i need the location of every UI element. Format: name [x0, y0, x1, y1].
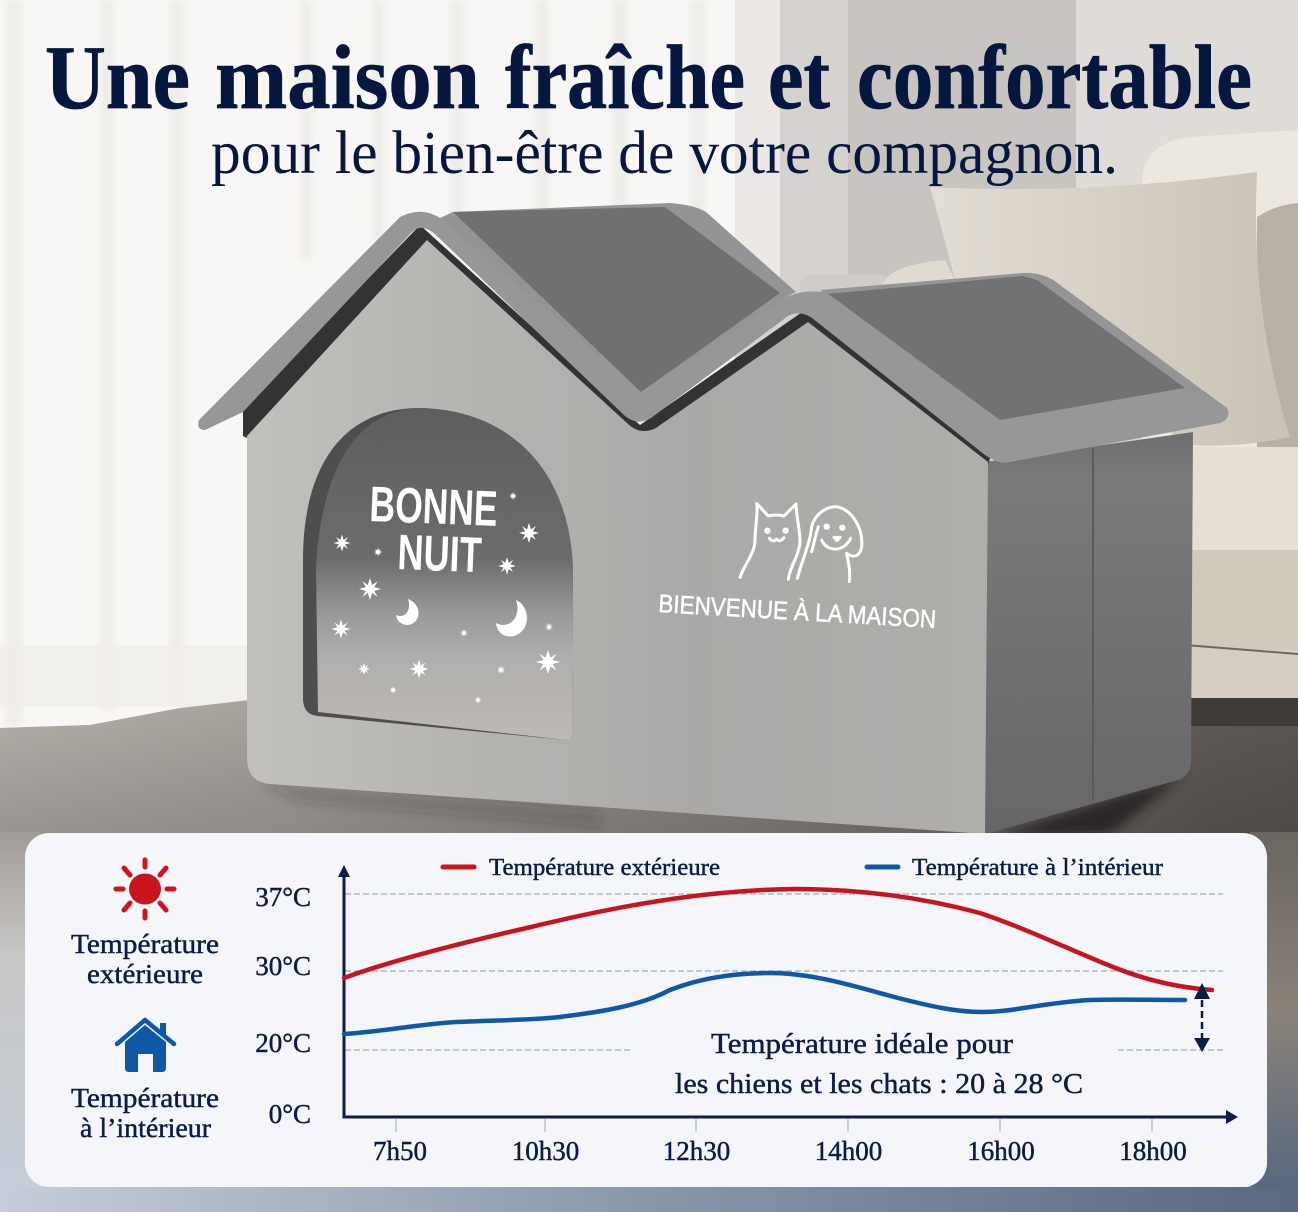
title: fraîche — [505, 27, 745, 128]
wall — [848, 0, 1298, 300]
window text — [369, 476, 499, 583]
right strip behind panel — [1250, 832, 1298, 1188]
front roof trim — [198, 212, 1228, 463]
x axis labels: 7h50 — [373, 1136, 427, 1166]
title: maison — [215, 27, 480, 128]
label: indoor temperature — [71, 1083, 219, 1143]
axes — [338, 865, 1238, 1124]
pet house — [198, 203, 1228, 834]
x axis labels: 10h30 — [512, 1136, 579, 1166]
icon: sun — [116, 860, 174, 918]
label: outdoor temperature: extérieure — [87, 959, 203, 989]
y axis labels: 20°C — [255, 1028, 311, 1058]
bottom strip — [0, 1187, 1298, 1212]
title: confortable — [857, 27, 1252, 128]
curtain — [0, 0, 848, 728]
y axis labels: 30°C — [255, 951, 311, 981]
line: indoor temperature — [344, 973, 1185, 1034]
cat — [740, 503, 800, 579]
label: outdoor temperature: Température — [71, 929, 219, 959]
icon: house — [117, 1020, 174, 1072]
house side wall — [985, 432, 1193, 834]
callout: ideal temperature — [675, 1028, 1083, 1100]
x axis labels: 16h00 — [967, 1136, 1035, 1166]
right roof surface — [820, 273, 1227, 440]
sofa — [800, 130, 1298, 726]
x axis labels: 12h30 — [663, 1136, 730, 1166]
house front wall — [247, 240, 988, 834]
title — [45, 27, 1252, 128]
x axis labels: 18h00 — [1119, 1136, 1187, 1166]
dog — [797, 507, 862, 582]
house shadow on floor — [255, 775, 1185, 838]
left strip behind panel — [0, 832, 40, 1188]
legend: indoor: Température à l’intérieur — [912, 855, 1163, 881]
panel: temperature chart — [25, 833, 1267, 1187]
label: outdoor temperature — [71, 929, 219, 989]
grid lines — [345, 894, 1223, 1132]
x axis labels: 14h00 — [815, 1136, 882, 1166]
legend: outdoor: Température extérieure — [489, 855, 720, 881]
callout: ideal temperature: Température idéale pour — [711, 1028, 1013, 1060]
line: outdoor temperature — [344, 889, 1212, 990]
x axis labels — [373, 1136, 1187, 1166]
title: et — [768, 27, 830, 128]
logo text: BIENVENUE À LA MAISON — [658, 589, 937, 634]
callout: ideal temperature: les chiens et les chats : 20 à 28 °C — [675, 1068, 1083, 1100]
dark gap under roof — [243, 225, 992, 465]
label: indoor temperature: Température — [71, 1083, 219, 1113]
window stars and moons — [332, 492, 560, 704]
y axis labels: 0°C — [269, 1099, 311, 1129]
back roof surface — [440, 203, 796, 410]
title: Une — [45, 27, 190, 128]
window — [303, 408, 573, 740]
y axis labels: 37°C — [255, 882, 311, 912]
subtitle: pour le bien-être de votre compagnon. — [211, 120, 1118, 187]
arrow: ideal range — [1194, 983, 1210, 1052]
floor — [0, 700, 1298, 840]
window text: BONNE — [369, 476, 499, 537]
logo: cat and dog — [740, 503, 862, 582]
label: indoor temperature: à l’intérieur — [80, 1113, 211, 1143]
window text: NUIT — [397, 524, 483, 583]
y axis labels — [255, 882, 311, 1129]
